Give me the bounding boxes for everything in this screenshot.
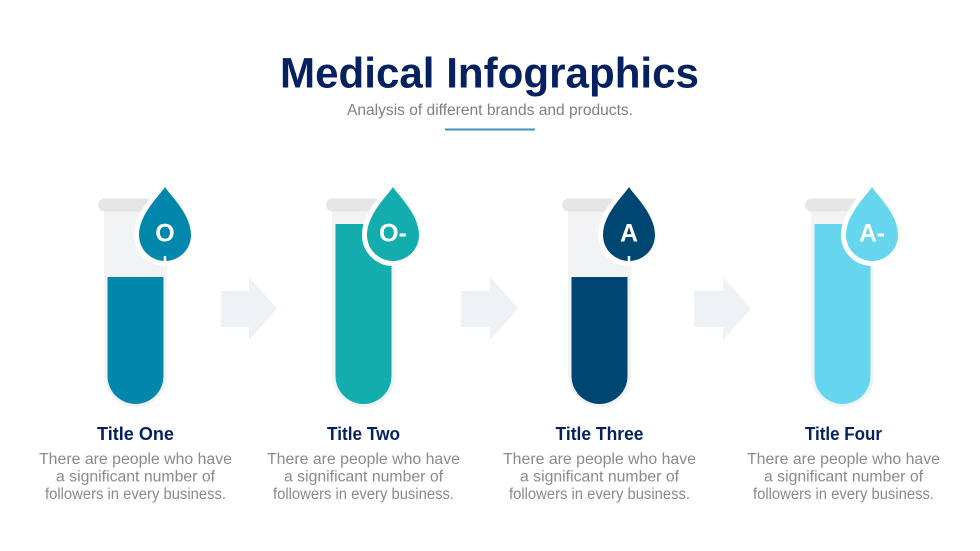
text block 2: [267, 423, 460, 503]
text block 3: There are people who have: [503, 451, 696, 468]
blood drop A: A: [620, 219, 638, 247]
text block 4: a significant number of: [764, 468, 924, 486]
text block 2: followers in every business.: [273, 486, 454, 503]
title: Medical Infographics: [280, 50, 699, 98]
text block 2: There are people who have: [267, 451, 460, 468]
text block 2: Title Two: [327, 423, 400, 444]
text block 4: followers in every business.: [753, 486, 934, 503]
blood drop O-: [367, 187, 419, 261]
text block 1: Title One: [97, 423, 174, 444]
text block 4: Title Four: [805, 423, 882, 444]
text block 3: a significant number of: [520, 468, 680, 486]
text block 3: followers in every business.: [509, 486, 690, 503]
blood drop A: [603, 187, 655, 262]
test tube 4: [805, 187, 898, 407]
title underline: [445, 128, 535, 130]
subtitle: Analysis of different brands and products.: [347, 102, 633, 119]
text block 4: There are people who have: [747, 451, 940, 468]
text block 3: Title Three: [556, 423, 644, 444]
blood drop O-: O-: [379, 219, 407, 247]
text block 2: a significant number of: [284, 468, 444, 486]
test tube 2: [326, 187, 419, 407]
text block 1: [39, 423, 232, 503]
blood drop A-: [846, 187, 898, 261]
text block 1: a significant number of: [56, 468, 216, 486]
blood drop O: [139, 187, 191, 262]
arrow 3: [694, 277, 751, 340]
arrow 1: [221, 277, 277, 340]
test tube 3: [562, 187, 655, 407]
blood drop A-: A-: [859, 219, 885, 247]
text block 4: [747, 423, 940, 503]
arrow 2: [461, 277, 518, 340]
text block 3: [503, 423, 696, 503]
blood drop O: O: [155, 219, 175, 247]
text block 1: There are people who have: [39, 451, 232, 468]
text block 1: followers in every business.: [45, 486, 226, 503]
test tube 1: [98, 187, 191, 407]
